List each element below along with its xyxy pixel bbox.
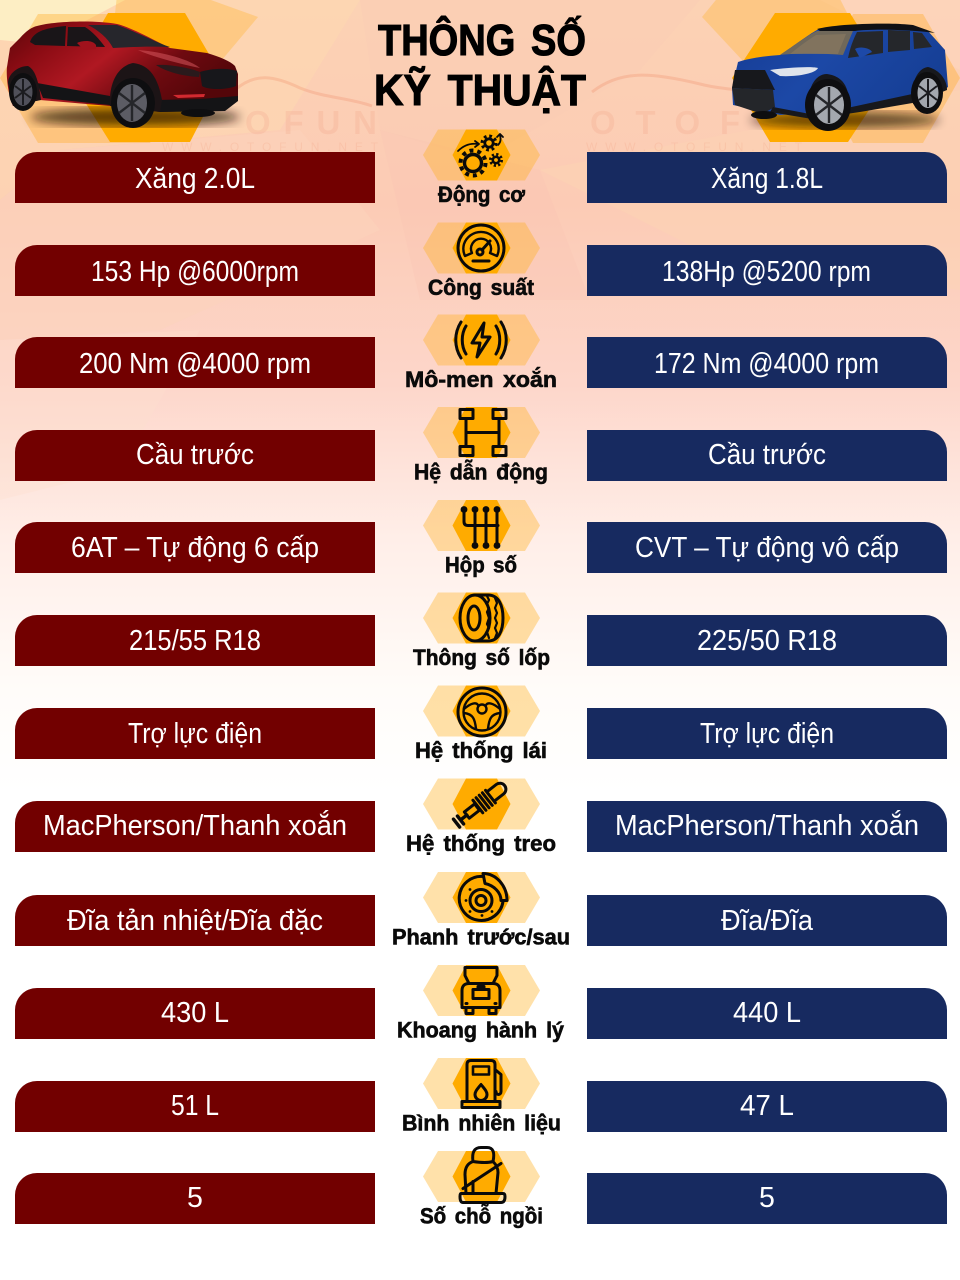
title: KỸ THUẬT [374,65,586,115]
row 9: brakes right bar [587,895,947,946]
row 4: drivetrain right bar [587,430,947,481]
watermark right: OTOFUN: OTOF [590,104,740,141]
icon: gears [458,134,503,176]
row 5: gearbox left bar [15,522,375,573]
icon: tyre [460,595,503,641]
row 1: Xăng right bar: Xăng 1.8L [711,163,823,195]
row 3: torque left bar [15,337,375,388]
icon: car trunk [462,968,500,1014]
row 6: tyre right bar: 225/50 R18 [697,625,837,657]
row 8: suspension right bar: MacPherson/Thanh xoắn [615,810,919,842]
row 8: suspension left bar [15,801,375,852]
row 7: steering right bar: Trợ lực điện [700,718,834,750]
label: Hệ thống lái [415,738,547,763]
row 8: suspension right bar [587,801,947,852]
row 6: tyre left bar: 215/55 R18 [129,625,261,657]
row 11: fuel left bar [15,1081,375,1132]
title [374,14,586,115]
label: Hệ thống treo [406,831,556,856]
row 10: trunk right bar [587,988,947,1039]
spec: Động cơ [423,130,540,207]
row 11: fuel right bar: 47 L [740,1090,794,1122]
row 9: brakes right bar: Đĩa/Đĩa [721,905,813,937]
watermark right: OTOFUN: WWW.OTOFUN.NET [586,140,803,154]
label: Bình nhiên liệu [402,1110,561,1136]
row 8: suspension left bar: MacPherson/Thanh xoắn [43,810,347,842]
row 10: trunk left bar: 430 L [161,997,229,1029]
icon: steering wheel [458,688,506,736]
decorative hexagons right [702,0,960,143]
row 12: seats left bar: 5 [187,1182,203,1214]
spec: Khoang hành lý [397,965,565,1042]
decorative hexagons left [0,0,258,143]
row 5: gearbox right bar: CVT – Tự động vô cấp [635,532,899,564]
label: Hệ dẫn động [414,460,548,484]
title: THÔNG SỐ [378,14,586,65]
icon: seat with belt [460,1148,505,1202]
row 4: drivetrain left bar [15,430,375,481]
label: Số chỗ ngồi [420,1204,543,1228]
row 7: steering left bar [15,708,375,759]
icon: drivetrain [460,410,506,456]
label: Mô-men xoắn [405,367,557,392]
watermark left: OTOFUN [162,78,379,154]
spec: Hệ dẫn động [414,407,548,484]
label: Công suất [428,275,535,300]
watermark left: OTOFUN: OFUN [245,104,377,141]
spec: Hệ thống treo [406,778,556,856]
icon: torque bolt [456,322,506,358]
row 7: steering left bar: Trợ lực điện [128,718,262,750]
spec: Hộp số [423,500,540,578]
row 6: tyre right bar [587,615,947,666]
watermark right: OTOFUN [586,75,803,154]
row 6: tyre left bar [15,615,375,666]
row 12: seats left bar [15,1173,375,1224]
spec: Mô-men xoắn [405,314,557,392]
row 10: trunk right bar: 440 L [733,997,801,1029]
label: Phanh trước/sau [392,924,570,950]
row 2: power right bar [587,245,947,296]
row 5: gearbox left bar: 6AT – Tự động 6 cấp [71,532,319,564]
label: Thông số lốp [413,645,550,670]
row 4: drivetrain left bar: Cầu trước [136,439,254,471]
row 3: torque right bar [587,337,947,388]
row 2: power right bar: 138Hp @5200 rpm [662,256,871,288]
row 3: torque left bar: 200 Nm @4000 rpm [79,348,311,380]
icon: shock absorber [452,779,510,829]
spec: Số chỗ ngồi [420,1148,543,1228]
row 3: torque right bar: 172 Nm @4000 rpm [654,348,879,380]
car: red Mazda CX-30 [7,22,240,128]
icon: gear shift [461,506,500,549]
row 12: seats right bar: 5 [759,1182,775,1214]
spec: Công suất [423,222,540,300]
row 4: drivetrain right bar: Cầu trước [708,439,826,471]
icon: fuel pump [462,1060,501,1108]
spec: Hệ thống lái [415,686,547,763]
label: Khoang hành lý [397,1018,565,1042]
spec: Phanh trước/sau [392,872,570,950]
row 2: power left bar: 153 Hp @6000rpm [91,256,299,288]
row 7: steering right bar [587,708,947,759]
spec: Bình nhiên liệu [402,1058,561,1136]
row 5: gearbox right bar [587,522,947,573]
row 11: fuel left bar: 51 L [171,1090,219,1122]
spec: Thông số lốp [413,592,550,670]
label: Hộp số [445,552,517,578]
row 10: trunk left bar [15,988,375,1039]
row 2: power left bar [15,245,375,296]
row 1: Xăng left bar [15,152,375,203]
row 11: fuel right bar [587,1081,947,1132]
row 9: brakes left bar: Đĩa tản nhiệt/Đĩa đặc [67,905,323,937]
row 9: brakes left bar [15,895,375,946]
row 1: Xăng right bar [587,152,947,203]
label: Động cơ [438,182,525,207]
car: blue Toyota Corolla Cross [732,24,948,131]
icon: speedometer [458,225,504,271]
row 1: Xăng left bar: Xăng 2.0L [135,163,255,195]
row 12: seats right bar [587,1173,947,1224]
icon: brake disc [459,874,507,920]
watermark left: OTOFUN: WWW.OTOFUN.NET [162,140,379,154]
